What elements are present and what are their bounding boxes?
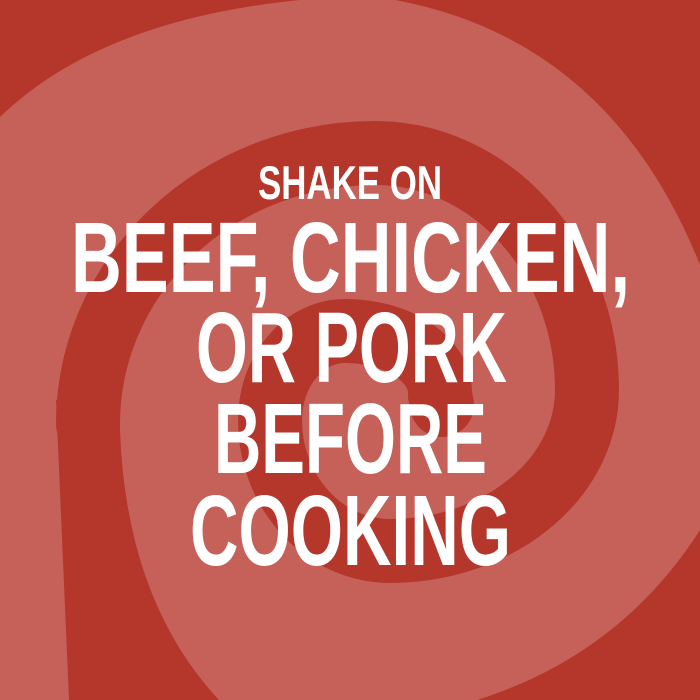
headline line 2: OR PORK (196, 292, 507, 404)
headline line 4: COOKING (190, 475, 511, 587)
headline line 3: BEFORE (214, 383, 487, 495)
subheading: SHAKE ON: SHAKE ON (258, 156, 442, 209)
text block: headline (71, 156, 630, 587)
